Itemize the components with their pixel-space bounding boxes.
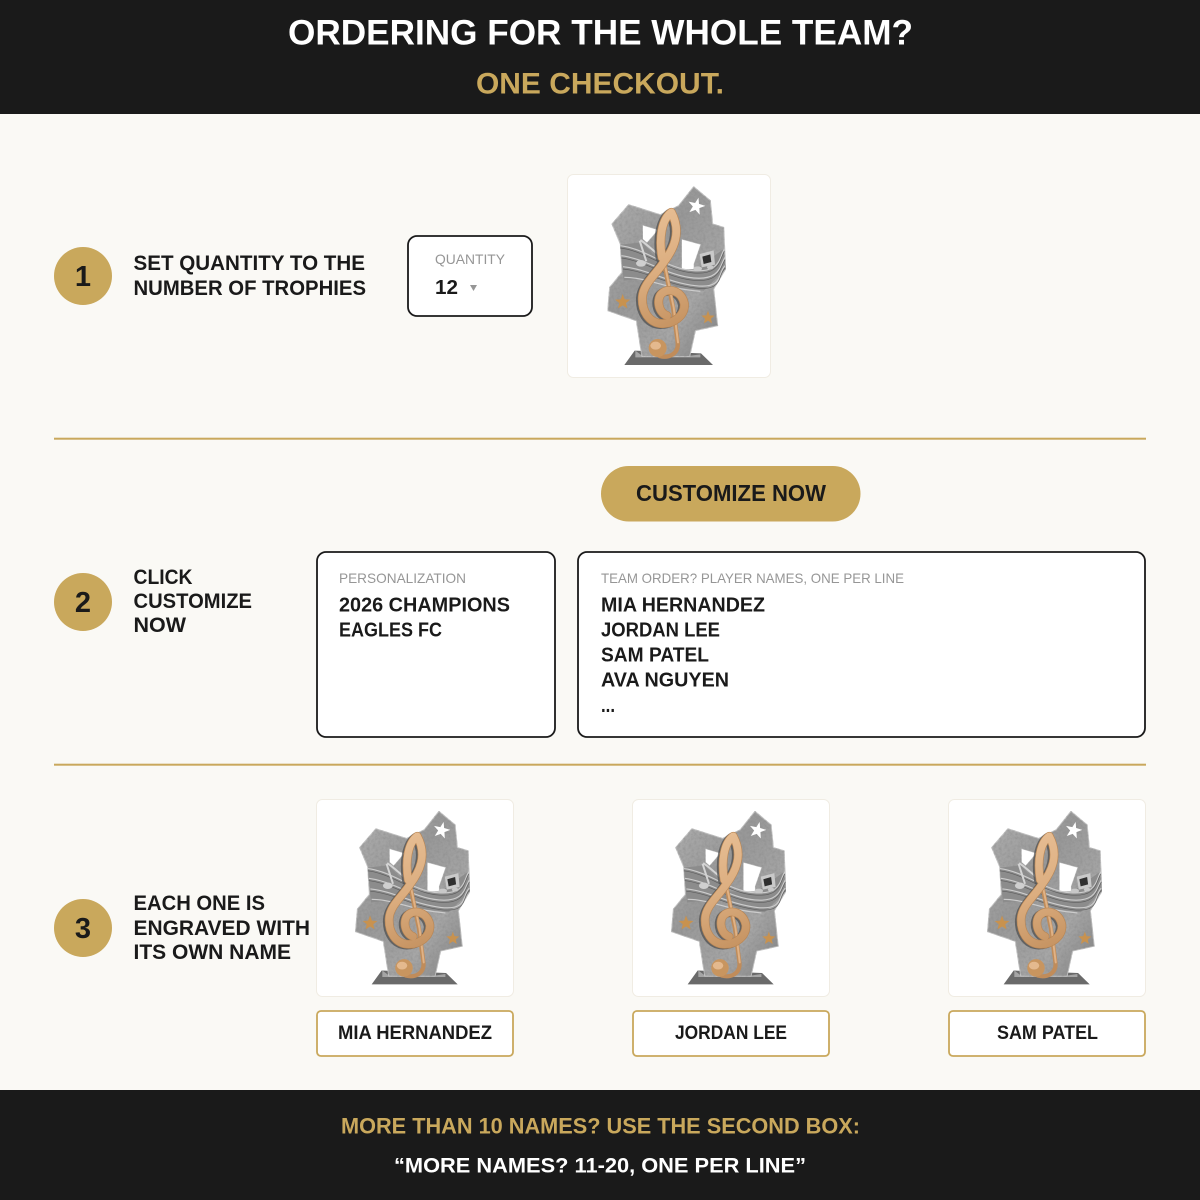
team names field: JORDAN LEE [601,620,720,642]
subtitle: ONE CHECKOUT. [476,68,724,100]
trophy card: Mia Hernandez: MIA HERNANDEZ [338,1023,492,1044]
footer band [0,1090,1200,1200]
customize now button [601,466,860,522]
step 1 number badge: 1 [75,261,91,293]
team names field: SAM PATEL [601,644,709,666]
step 2 number badge: 2 [75,587,91,619]
team names field [578,552,1145,737]
step 3 number badge [54,899,112,957]
footer note: MORE THAN 10 NAMES? USE THE SECOND BOX: [341,1114,860,1138]
step 2 instruction: CLICK [134,566,192,589]
trophy card: Mia Hernandez [316,800,514,1056]
quantity selector: QUANTITY [435,251,506,267]
step 2 instruction [134,566,252,637]
trophy card: Jordan Lee [632,800,830,1056]
team names field: MIA HERNANDEZ [601,594,765,616]
team names field: ... [601,695,615,717]
step 3 instruction: ITS OWN NAME [134,941,291,964]
step 3 number badge: 3 [75,913,91,945]
trophy product card [568,174,770,378]
personalization field: EAGLES FC [339,620,442,642]
step 1 instruction: SET QUANTITY TO THE [134,252,365,275]
header band [0,0,1200,114]
customize now button: CUSTOMIZE NOW [636,480,826,506]
step 3 instruction [134,892,310,964]
step 3 instruction: EACH ONE IS [134,892,265,915]
personalization field: PERSONALIZATION [339,570,466,586]
step 2 instruction: NOW [134,614,186,637]
trophy card: Sam Patel: SAM PATEL [997,1023,1098,1044]
step 1 number badge [54,247,112,305]
step 1 instruction: NUMBER OF TROPHIES [134,277,366,300]
quantity selector [408,236,532,316]
trophy card: Jordan Lee: JORDAN LEE [675,1023,787,1044]
step 1 row [54,174,770,378]
title: ORDERING FOR THE WHOLE TEAM? [288,14,913,52]
step 3 instruction: ENGRAVED WITH [134,917,310,940]
team names field: AVA NGUYEN [601,670,729,692]
step 3 row [54,800,1146,1056]
divider [54,764,1146,766]
divider [54,438,1146,440]
trophy card: Sam Patel [948,800,1146,1056]
step 2 number badge [54,573,112,631]
quantity selector: 12 [435,277,458,299]
personalization field: 2026 CHAMPIONS [339,594,510,616]
footer quote: “MORE NAMES? 11-20, ONE PER LINE” [394,1154,806,1178]
personalization field [317,552,555,737]
team names field: TEAM ORDER? PLAYER NAMES, ONE PER LINE [601,570,904,586]
step 2 instruction: CUSTOMIZE [134,590,252,613]
step 2 row [54,466,1145,737]
step 1 instruction [134,252,366,300]
